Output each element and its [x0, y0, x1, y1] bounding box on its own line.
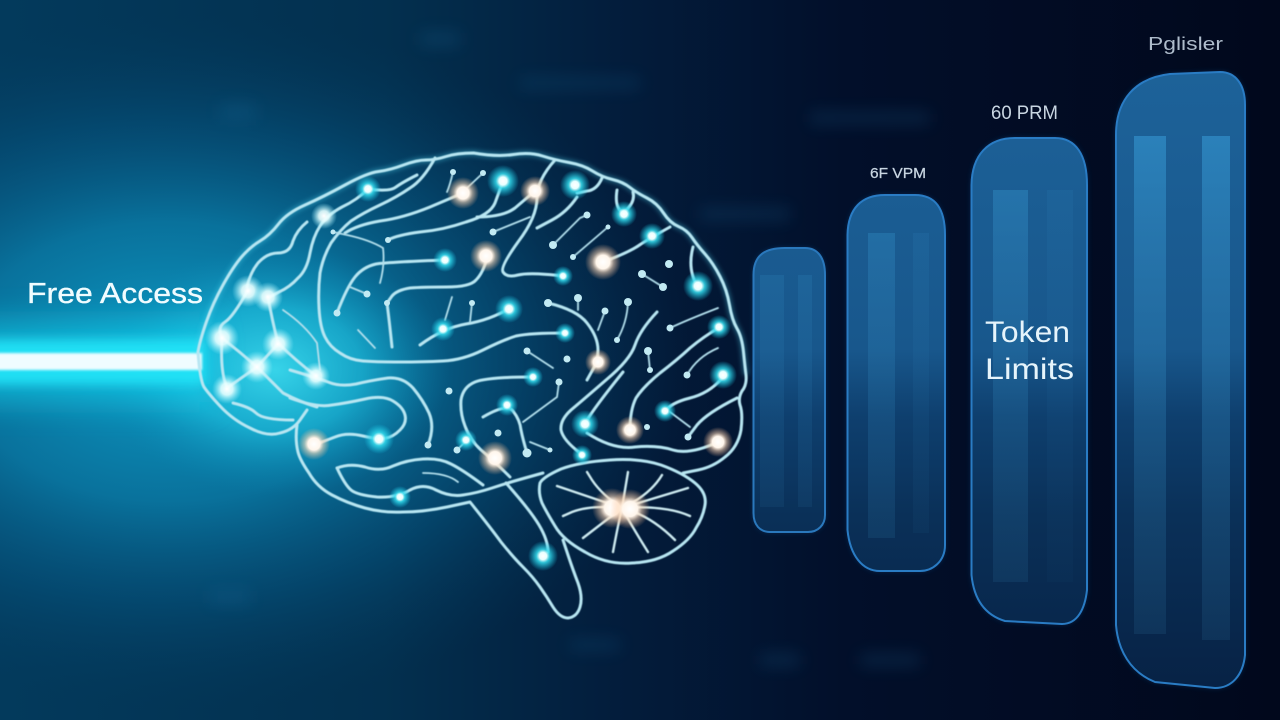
fine branches [283, 172, 718, 482]
bar 3 [972, 138, 1087, 624]
brain illustration [198, 153, 746, 618]
folds: top right [503, 160, 563, 276]
label: bar 3 rate: 60 PRM [991, 103, 1058, 124]
label: Token Limits: Limits [985, 353, 1074, 386]
temporal lobe [337, 459, 483, 485]
label: Token Limits [985, 316, 1074, 386]
glowing nodes: cyan [355, 165, 737, 571]
label: Free Access: Free Access [27, 278, 203, 310]
cerebellum rays [557, 472, 690, 552]
small dots [330, 169, 692, 458]
folds: lower temporal [290, 370, 432, 445]
frontal cluster lines [220, 290, 248, 387]
bar 1 [754, 248, 825, 532]
brain outline and folds [198, 153, 746, 618]
bar chart: rate tiers [754, 72, 1245, 688]
folds: mid right [548, 303, 598, 380]
temporal base and brainstem [296, 425, 581, 618]
folds: upper frontal [319, 158, 565, 362]
brain outline glow [198, 153, 746, 375]
label: Token Limits: Token [985, 316, 1070, 349]
cerebellum [539, 460, 705, 563]
glowing nodes: frontal lobe cluster [205, 203, 337, 404]
bar 4 [1116, 72, 1245, 688]
frontal base [198, 352, 307, 434]
label: bar 2 rate: 6F VPM [870, 165, 926, 182]
label: bar 4 policies: Pglisler [1148, 34, 1223, 54]
glowing nodes: white-orange [298, 176, 733, 529]
light beam [0, 322, 210, 402]
bar 2 [848, 195, 945, 571]
